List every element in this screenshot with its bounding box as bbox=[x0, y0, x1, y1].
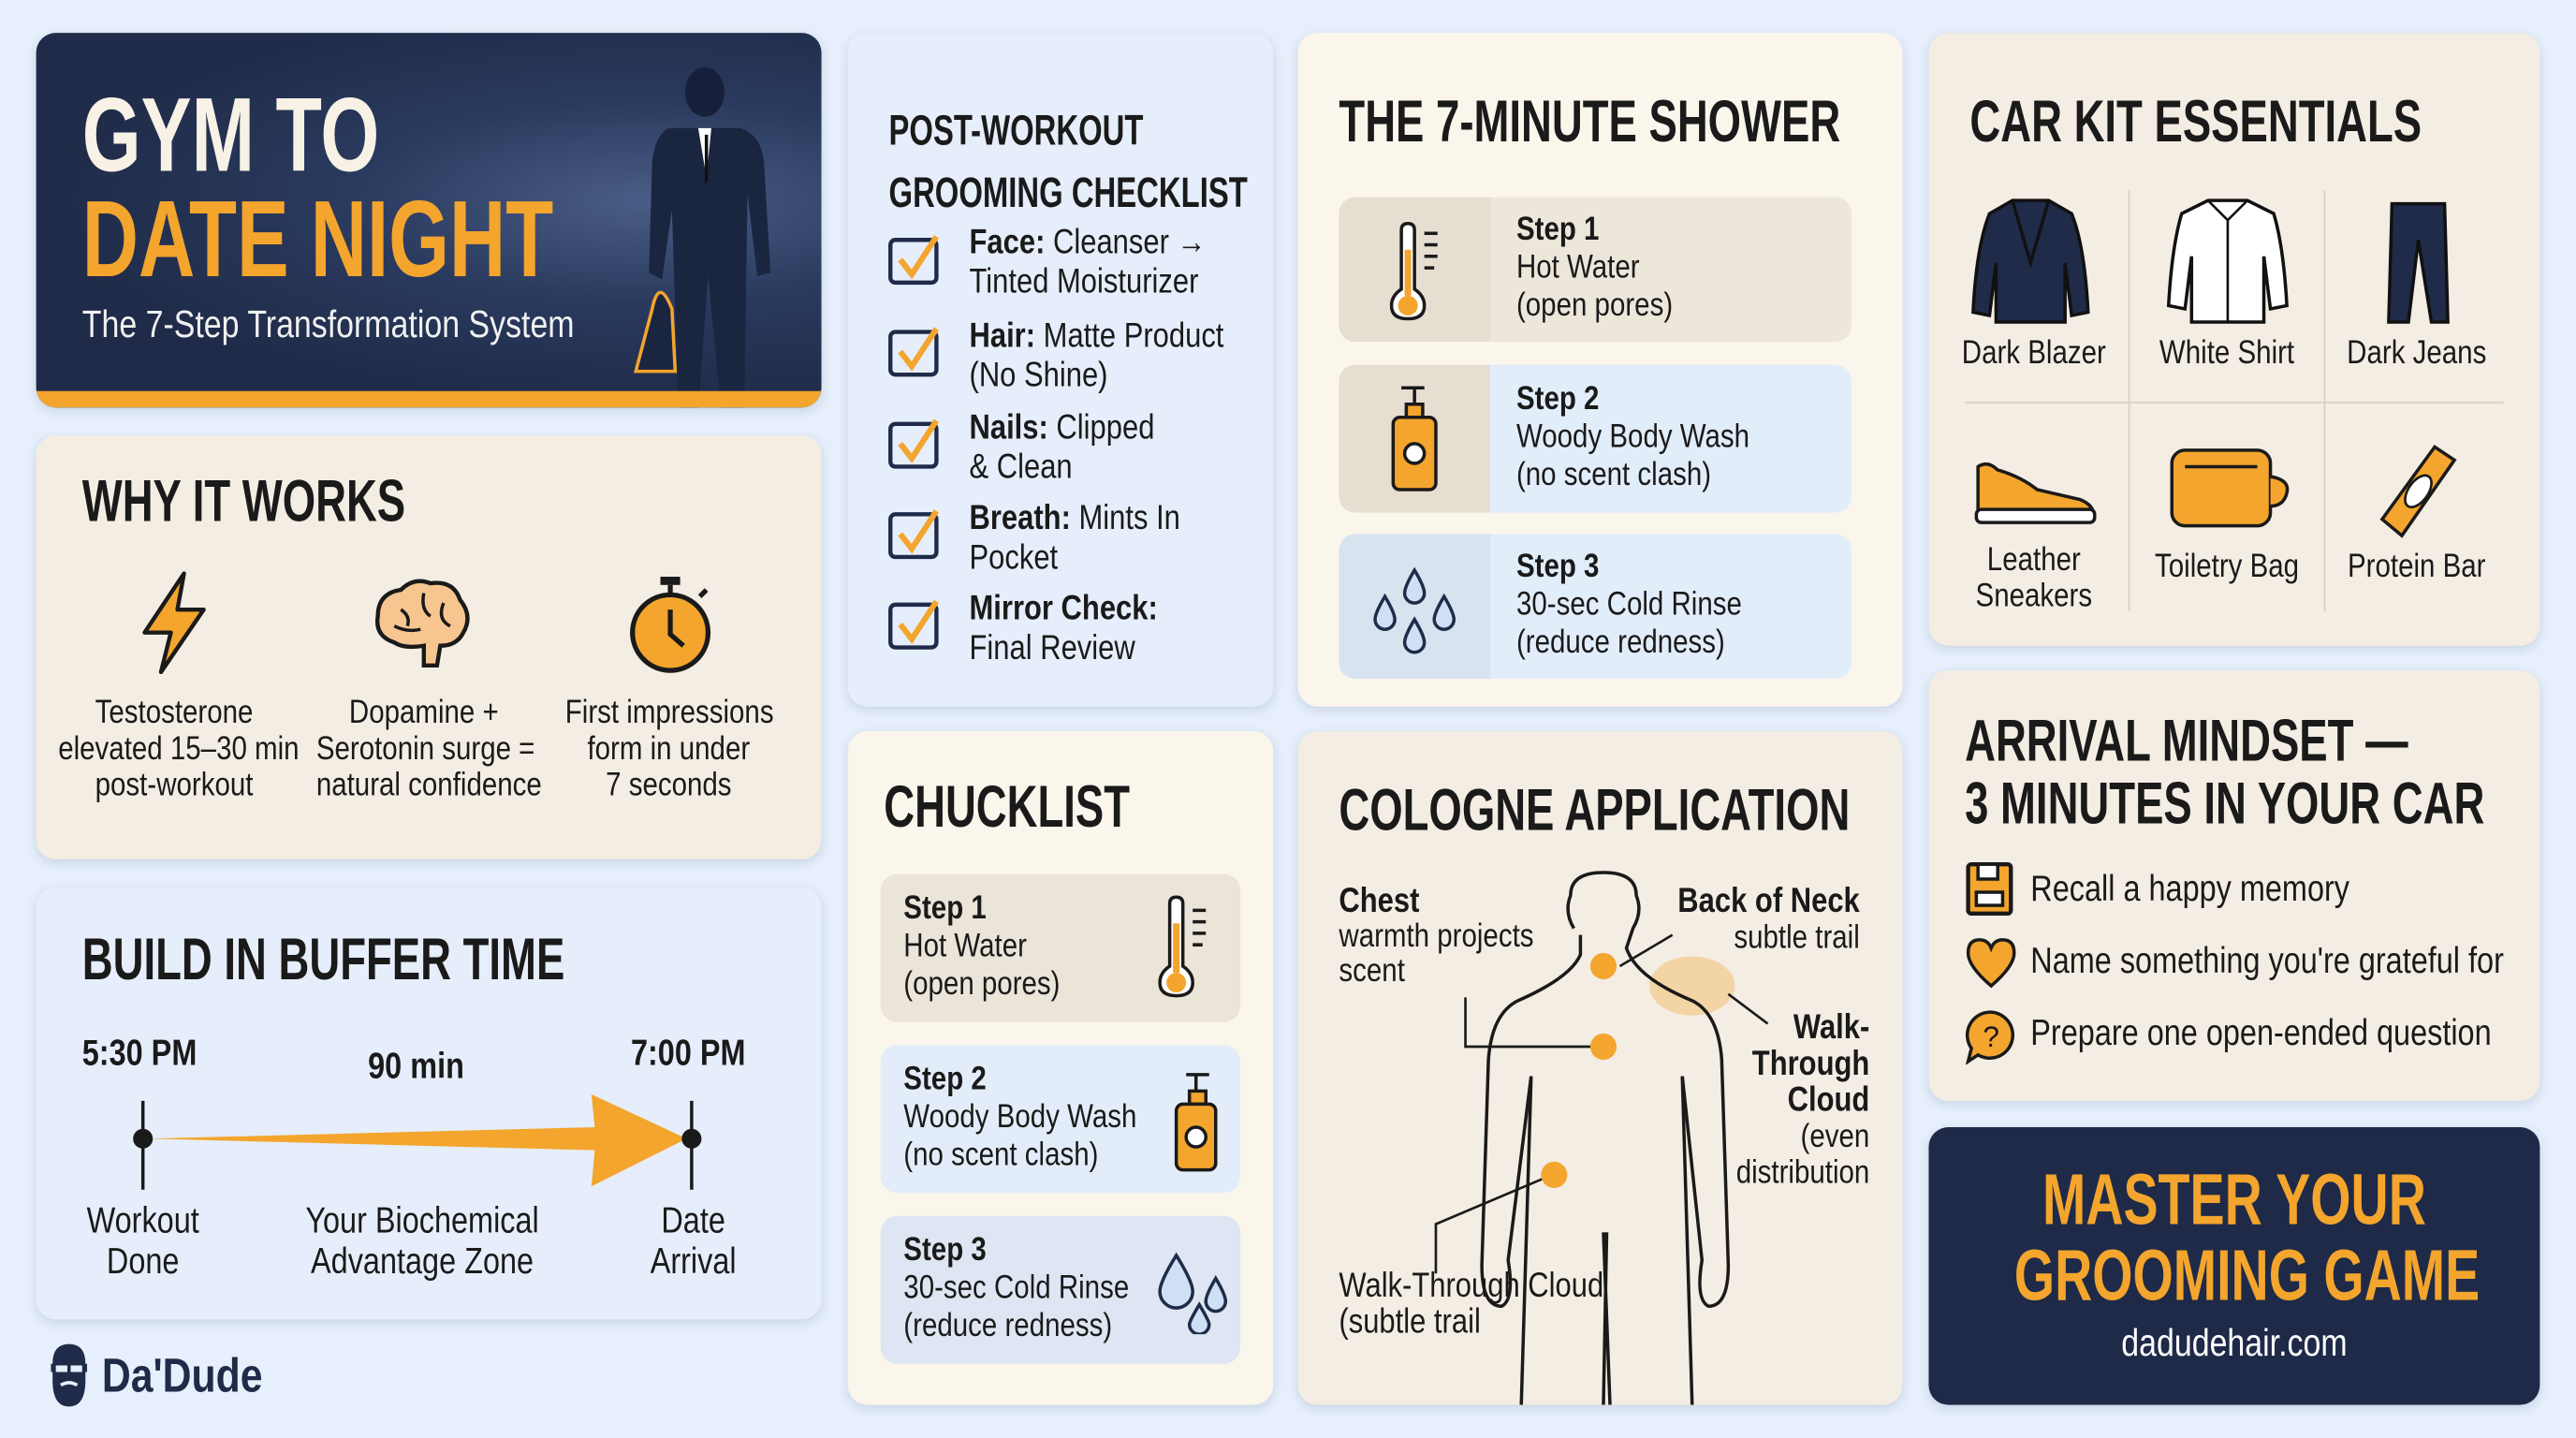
panel: buffer time: 7:00 PM bbox=[631, 1032, 746, 1073]
checklist items: (No Shine) bbox=[970, 357, 1108, 394]
panel: master your grooming game bbox=[1928, 1127, 2539, 1405]
heading: CHUCKLIST bbox=[884, 772, 1130, 840]
logo: Da'Dude bbox=[102, 1351, 263, 1403]
panel: buffer time: Arrival bbox=[651, 1240, 737, 1282]
icon: man silhouette bbox=[634, 67, 770, 408]
step 1: (open pores) bbox=[903, 966, 1060, 1003]
step 3 bbox=[1339, 534, 1852, 679]
checklist items: & Clean bbox=[970, 448, 1073, 487]
heading: WHY IT WORKS bbox=[82, 466, 405, 534]
step 2: Step 2 bbox=[1516, 381, 1599, 418]
panel: hero: DATE NIGHT bbox=[82, 178, 553, 299]
text: testosterone: elevated 15–30 min bbox=[58, 731, 300, 768]
step 2: (no scent clash) bbox=[903, 1137, 1098, 1173]
icon: sneaker bbox=[1975, 462, 2097, 524]
text: first impressions: 7 seconds bbox=[606, 768, 732, 803]
checklist items: Hair: Matte Product bbox=[970, 317, 1223, 355]
step 2: Woody Body Wash bbox=[1516, 419, 1749, 455]
text: dopamine: Dopamine + bbox=[349, 695, 499, 731]
step 2: Woody Body Wash bbox=[903, 1099, 1136, 1136]
label: walk-through cloud bottom: Walk-Through Cloud bbox=[1339, 1267, 1603, 1305]
text: dopamine: Serotonin surge = bbox=[316, 731, 534, 768]
checklist items: Mirror Check: bbox=[970, 590, 1158, 627]
panel: cologne application bbox=[1298, 731, 1902, 1405]
step 2: Step 2 bbox=[903, 1062, 987, 1097]
text: testosterone bbox=[58, 695, 300, 803]
icon: protein bar bbox=[2379, 445, 2456, 538]
panel: car kit: Toiletry Bag bbox=[2155, 549, 2299, 585]
panel: chucklist bbox=[848, 731, 1273, 1405]
icon: toiletry bag bbox=[2170, 448, 2290, 528]
step 1: Step 1 bbox=[903, 890, 987, 927]
step 3 bbox=[881, 1216, 1240, 1364]
checklist items: Face: Cleanser → bbox=[970, 224, 1206, 261]
panel: arrival mindset: Name something you're grateful for bbox=[2030, 940, 2504, 981]
panel: why it works bbox=[37, 435, 822, 859]
step 1: Hot Water bbox=[1516, 250, 1640, 286]
step 3: 30-sec Cold Rinse bbox=[903, 1270, 1129, 1306]
panel: buffer time: Advantage Zone bbox=[311, 1240, 534, 1282]
label: back of neck: subtle trail bbox=[1734, 920, 1860, 956]
orange band bbox=[37, 391, 822, 407]
panel: master your grooming game: MASTER YOUR bbox=[2042, 1160, 2426, 1240]
icon: lightning bbox=[142, 571, 206, 674]
panel: car kit bbox=[1928, 33, 2539, 646]
panel: car kit: Sneakers bbox=[1976, 579, 2092, 614]
text: first impressions: First impressions bbox=[565, 695, 774, 731]
icon: stopwatch bbox=[630, 577, 711, 673]
icon: question bbox=[1966, 1010, 2014, 1065]
panel: car kit: Dark Blazer bbox=[1962, 335, 2106, 372]
heading: 3 MINUTES IN YOUR CAR bbox=[1965, 769, 2484, 836]
panel: buffer time: Done bbox=[107, 1240, 179, 1282]
panel: arrival mindset: Prepare one open-ended question bbox=[2030, 1012, 2492, 1053]
step 3: (reduce redness) bbox=[903, 1308, 1112, 1344]
text: testosterone: Testosterone bbox=[95, 695, 253, 731]
checklist items bbox=[888, 224, 1224, 668]
heading: THE 7-MINUTE SHOWER bbox=[1339, 87, 1840, 154]
icon: brain bbox=[374, 579, 470, 668]
step 2 bbox=[881, 1045, 1240, 1193]
step 1: Hot Water bbox=[903, 929, 1027, 964]
timeline: 5:30 PM bbox=[82, 1032, 197, 1073]
text: dopamine: natural confidence bbox=[316, 768, 542, 803]
logo bbox=[51, 1344, 263, 1406]
checklist items: Pocket bbox=[970, 539, 1058, 577]
label: walk-through cloud right: Through bbox=[1752, 1045, 1869, 1083]
text: first impressions bbox=[565, 695, 774, 803]
heading bbox=[1965, 707, 2484, 836]
label: walk-through cloud bottom bbox=[1339, 1267, 1603, 1341]
checklist items: Nails: Clipped bbox=[970, 409, 1154, 447]
panel: car kit: Protein Bar bbox=[2348, 549, 2486, 585]
checklist items: Tinted Moisturizer bbox=[970, 263, 1198, 301]
label: walk-through cloud right: distribution bbox=[1736, 1155, 1869, 1191]
text: dopamine bbox=[316, 695, 542, 803]
panel: grooming checklist bbox=[848, 33, 1273, 707]
panel: arrival mindset: Recall a happy memory bbox=[2030, 868, 2349, 909]
label: walk-through cloud right: Cloud bbox=[1788, 1081, 1869, 1119]
label: chest bbox=[1339, 882, 1534, 990]
panel: arrival mindset bbox=[1928, 670, 2539, 1101]
icon: heart bbox=[1966, 938, 2016, 989]
heading: GROOMING CHECKLIST bbox=[889, 168, 1248, 217]
panel: car kit: Dark Jeans bbox=[2347, 335, 2486, 372]
icon: dark jeans bbox=[2387, 202, 2450, 324]
panel: buffer time: Workout bbox=[87, 1199, 199, 1240]
heading: CAR KIT ESSENTIALS bbox=[1969, 87, 2422, 154]
label: walk-through cloud bottom: (subtle trail bbox=[1339, 1303, 1481, 1341]
panel: master your grooming game: GROOMING GAME bbox=[2014, 1236, 2480, 1316]
step 3: (reduce redness) bbox=[1516, 624, 1725, 661]
heading: BUILD IN BUFFER TIME bbox=[82, 925, 564, 992]
heading: POST-WORKOUT bbox=[889, 105, 1143, 154]
panel: buffer time: Your Biochemical bbox=[305, 1199, 539, 1240]
label: walk-through cloud right bbox=[1736, 1009, 1869, 1191]
label: walk-through cloud right: Walk- bbox=[1793, 1009, 1869, 1047]
step 1: Step 1 bbox=[1516, 212, 1599, 248]
subtitle: The 7-Step Transformation System bbox=[82, 302, 575, 345]
label: chest: Chest bbox=[1339, 882, 1419, 920]
panel: buffer time: 90 min bbox=[368, 1045, 464, 1086]
label: back of neck bbox=[1677, 882, 1860, 956]
step 2 bbox=[1339, 365, 1852, 513]
body diagram bbox=[1434, 871, 1769, 1404]
icon: white shirt bbox=[2166, 198, 2289, 324]
icon: question: ? bbox=[1983, 1020, 1999, 1053]
heading: COLOGNE APPLICATION bbox=[1339, 775, 1850, 843]
title: GYM TO bbox=[82, 76, 379, 194]
checklist items: Final Review bbox=[970, 629, 1135, 668]
label: walk-through cloud right: (even bbox=[1801, 1119, 1869, 1155]
heading: ARRIVAL MINDSET — bbox=[1965, 707, 2408, 774]
step 3: Step 3 bbox=[1516, 549, 1599, 585]
panel: hero bbox=[37, 33, 822, 407]
step 1 bbox=[881, 874, 1240, 1022]
step 2: (no scent clash) bbox=[1516, 457, 1711, 493]
label: chest: scent bbox=[1339, 953, 1405, 990]
checklist items: Breath: Mints In bbox=[970, 500, 1180, 537]
step 3: Step 3 bbox=[903, 1232, 987, 1269]
heading bbox=[889, 105, 1248, 217]
panel: master your grooming game: dadudehair.com bbox=[2121, 1321, 2348, 1364]
text: first impressions: form in under bbox=[587, 731, 750, 768]
label: back of neck: Back of Neck bbox=[1677, 882, 1860, 920]
panel: buffer time: Date bbox=[661, 1199, 725, 1240]
label: chest: warmth projects bbox=[1339, 918, 1534, 955]
step 3: 30-sec Cold Rinse bbox=[1516, 587, 1742, 623]
panel: car kit: White Shirt bbox=[2159, 335, 2294, 372]
icon: dark blazer bbox=[1971, 198, 2090, 324]
step 1: (open pores) bbox=[1516, 287, 1673, 324]
icon: floppy bbox=[1966, 862, 2012, 916]
text: testosterone: post-workout bbox=[95, 768, 253, 803]
step 1 bbox=[1339, 198, 1852, 342]
panel: buffer time bbox=[37, 888, 822, 1319]
panel: car kit: Leather bbox=[1987, 542, 2081, 579]
panel: 7-minute shower bbox=[1298, 33, 1902, 707]
